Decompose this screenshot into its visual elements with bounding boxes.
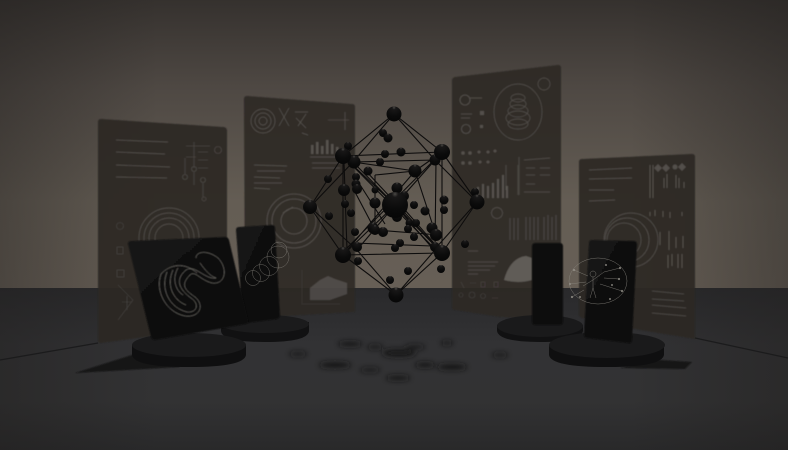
orbit and stacked rings (494, 78, 550, 140)
device: left phone (236, 225, 280, 323)
swirl line art (159, 252, 224, 316)
device: right phone (584, 240, 637, 343)
panel: far left data screen (98, 119, 227, 343)
text lines (116, 140, 170, 178)
pie wedge (504, 256, 532, 282)
crosshair glyph (328, 112, 349, 130)
floor (0, 288, 788, 450)
radial dial (251, 108, 308, 135)
line art: figure network across phone (569, 258, 627, 304)
panel: far right data screen (579, 154, 695, 339)
area chart (302, 270, 347, 304)
pedestal: front right (549, 332, 692, 369)
panel: centre-left data screen (244, 96, 355, 318)
text lines (589, 168, 632, 201)
caption lines (254, 157, 352, 189)
device: dark column (532, 243, 563, 325)
large ring gauge (267, 194, 321, 248)
panel: tall centre-right data screen (452, 65, 561, 320)
small dials (460, 95, 482, 134)
bar chart (311, 140, 344, 154)
molecule hub nodes (303, 106, 484, 302)
node diagram (182, 142, 222, 201)
rings (604, 213, 658, 267)
concentric rings (139, 208, 199, 268)
bar chart (477, 175, 508, 198)
pedestal: back right (497, 315, 583, 342)
pedestal: front left (75, 333, 246, 373)
icon row (459, 282, 498, 298)
device: left tablet (128, 237, 248, 340)
ring marker (492, 208, 502, 218)
molecule back nodes (324, 129, 479, 284)
molecule bonds (310, 114, 477, 295)
pedestal: back left (221, 315, 309, 342)
footer lines (652, 291, 686, 316)
vertical meters and tables (468, 157, 556, 274)
wall background (0, 0, 788, 289)
line art: overlapping rings across phone (246, 242, 289, 286)
shadow: molecule on floor (289, 341, 508, 380)
diamonds row (654, 163, 686, 172)
small icons (116, 222, 133, 320)
floor contact lines (0, 338, 788, 360)
data dots (461, 111, 496, 165)
molecule: network structure (303, 106, 484, 302)
small bars (650, 165, 684, 268)
